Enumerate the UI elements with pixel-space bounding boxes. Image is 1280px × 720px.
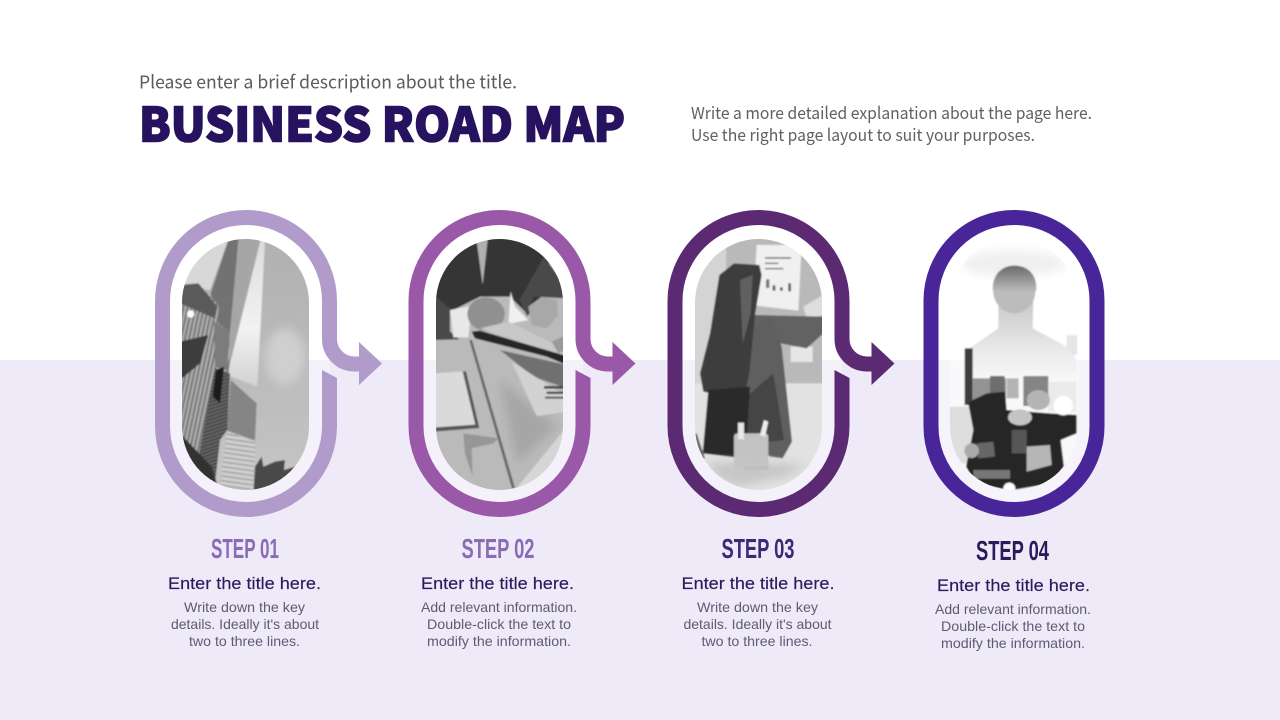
step text: modify the information.: [941, 635, 1085, 651]
step title: Enter the title here.: [421, 574, 574, 593]
step title: Enter the title here.: [937, 576, 1090, 595]
photo: business meeting: [433, 237, 567, 493]
title: BUSINESS ROAD MAP: [139, 86, 625, 156]
step text: Add relevant information.: [935, 601, 1091, 617]
step label: STEP 04: [976, 535, 1049, 566]
step text: [935, 601, 1091, 651]
step label: STEP 03: [722, 533, 794, 564]
description text: Write a more detailed explanation about the page here.: [691, 100, 1092, 124]
description text: [691, 100, 1092, 146]
photo: woman at whiteboard: [693, 237, 827, 493]
step text: Write down the key: [697, 599, 818, 615]
ring and arrow: step 01: [162, 218, 382, 510]
photo: silhouette with city: [948, 237, 1080, 495]
step text: two to three lines.: [189, 633, 300, 649]
step text: [684, 599, 832, 649]
description text: Use the right page layout to suit your purposes.: [691, 122, 1035, 146]
step label: STEP 02: [462, 533, 534, 564]
step text: two to three lines.: [702, 633, 812, 649]
subtitle: Please enter a brief description about the title.: [139, 68, 517, 94]
panel: step 04: [931, 218, 1097, 651]
step title: Enter the title here.: [168, 574, 321, 593]
background lower band: [0, 360, 1280, 720]
panel: step 03: [675, 218, 894, 649]
step text: Add relevant information.: [421, 599, 577, 615]
ring and arrow: step 02: [416, 218, 636, 510]
step text: Write down the key: [184, 599, 305, 615]
step text: details. Ideally it's about: [171, 616, 319, 632]
panel: step 02: [416, 218, 636, 649]
step text: [421, 599, 577, 649]
step text: Double-click the text to: [427, 616, 571, 632]
step title: Enter the title here.: [682, 574, 834, 593]
step label: STEP 01: [211, 533, 279, 564]
step text: modify the information.: [427, 633, 571, 649]
step text: [171, 599, 319, 649]
photo: skyscrapers: [180, 237, 313, 493]
ring: step 04: [931, 218, 1097, 510]
step text: Double-click the text to: [941, 618, 1085, 634]
ring and arrow: step 03: [675, 218, 894, 510]
panel: step 01: [162, 218, 382, 649]
step text: details. Ideally it's about: [684, 616, 832, 632]
